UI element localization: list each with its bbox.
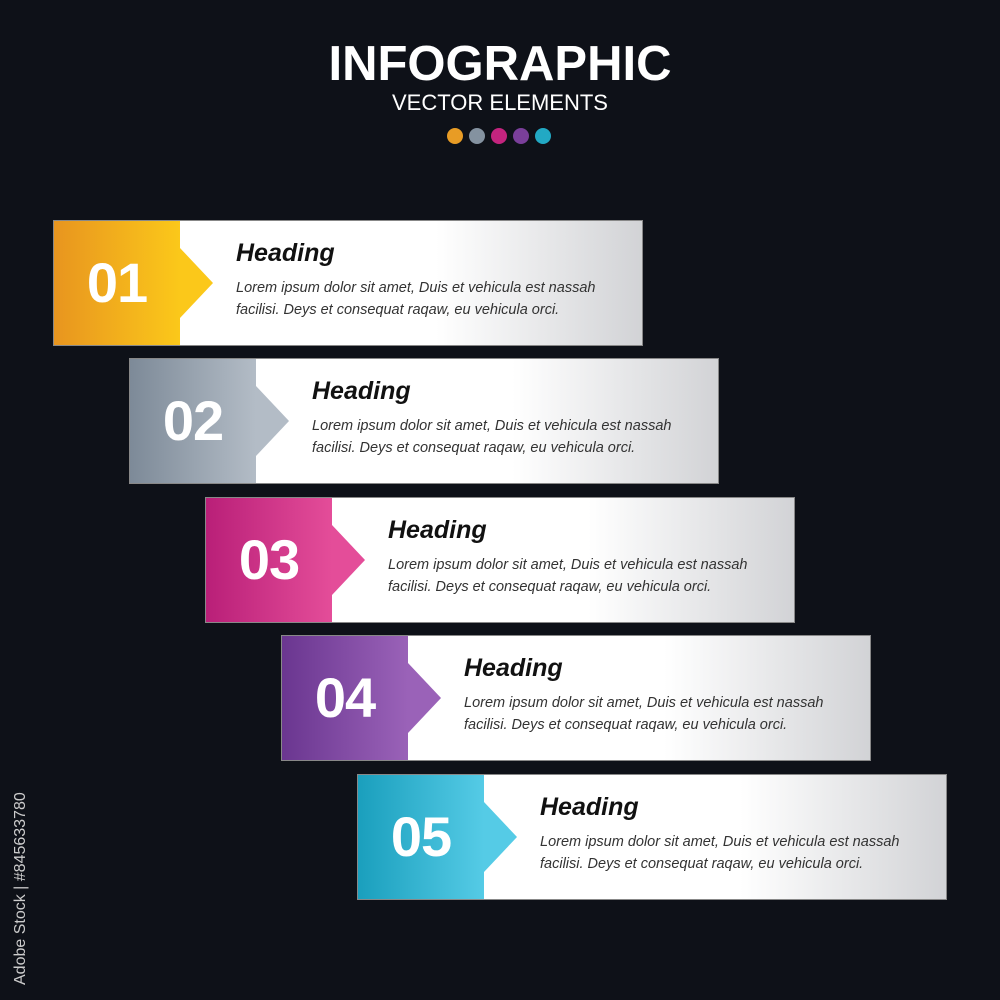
panel: step 03: Lorem ipsum dolor sit amet, Duis et vehicula est nassah facilisi. Deys et consequat raqaw, eu vehicula orci. — [388, 557, 747, 595]
panel: step 04: Lorem ipsum dolor sit amet, Duis et vehicula est nassah facilisi. Deys et consequat raqaw, eu vehicula orci. — [464, 695, 823, 733]
panel: step 04 — [281, 635, 871, 761]
panel: step 05: 05 — [391, 805, 451, 868]
panel: step 04: 04 — [315, 666, 375, 729]
side watermark text: Adobe Stock | #845633780 — [12, 792, 29, 985]
panel: step 05 — [357, 774, 947, 900]
panel: step 04: Heading — [464, 654, 563, 682]
color dots — [447, 128, 551, 144]
panel: step 02: 02 — [163, 389, 223, 452]
panel: step 05: Heading — [540, 793, 639, 821]
panel: step 01: Heading — [236, 239, 335, 267]
subtitle: VECTOR ELEMENTS — [392, 90, 608, 115]
panel: step 03: Heading — [388, 516, 487, 544]
panel: step 03: 03 — [239, 528, 299, 591]
panel: step 02 — [129, 358, 719, 484]
panel: step 01: Lorem ipsum dolor sit amet, Duis et vehicula est nassah facilisi. Deys et consequat raqaw, eu vehicula orci. — [236, 280, 595, 318]
title: INFOGRAPHIC — [328, 37, 672, 91]
panel: step 01 — [53, 220, 643, 346]
panel: step 02: Lorem ipsum dolor sit amet, Duis et vehicula est nassah facilisi. Deys et consequat raqaw, eu vehicula orci. — [312, 418, 671, 456]
panel: step 03 — [205, 497, 795, 623]
panel: step 01: 01 — [87, 251, 147, 314]
panel: step 02: Heading — [312, 377, 411, 405]
panel: step 05: Lorem ipsum dolor sit amet, Duis et vehicula est nassah facilisi. Deys et consequat raqaw, eu vehicula orci. — [540, 834, 899, 872]
